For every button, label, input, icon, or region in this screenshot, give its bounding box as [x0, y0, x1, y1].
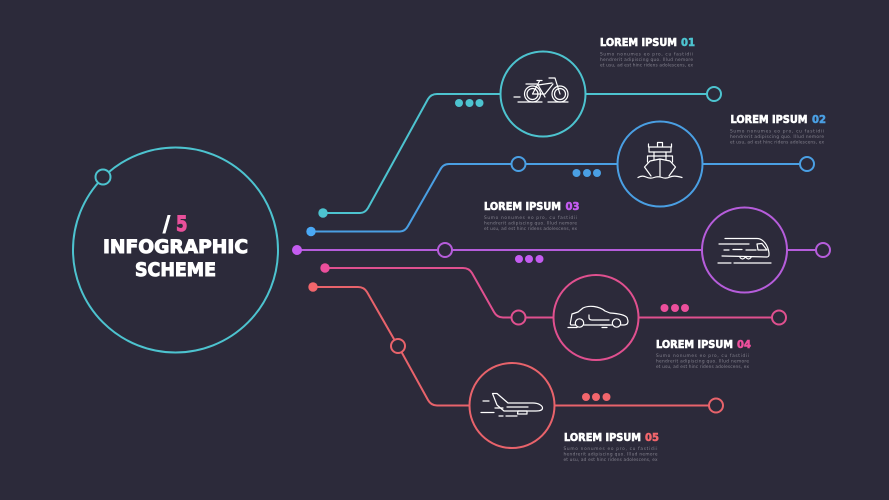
mid node 3 — [438, 243, 452, 257]
dots 2 — [572, 169, 601, 177]
text block 3: 03 — [566, 201, 580, 213]
icon: airplane — [481, 394, 542, 416]
text block 2: 02 — [812, 114, 826, 126]
text block 3 — [484, 201, 580, 232]
start dot 1 — [318, 208, 328, 218]
text block 4: et usu, ad est hinc ridens adolescens, ex — [656, 364, 749, 370]
dots 1 — [455, 99, 484, 107]
text block 3: et usu, ad est hinc ridens adolescens, ex — [484, 226, 577, 232]
text block 1: hendrerit adipiscing quo. Illud nemore — [600, 57, 693, 63]
icon circle 1 — [500, 52, 586, 136]
text block 5: LOREM IPSUM — [564, 432, 641, 444]
text block 2 — [730, 114, 826, 146]
title: number: / — [163, 212, 170, 236]
icon circle 4 — [554, 275, 638, 360]
text block 1 — [600, 37, 695, 68]
end node 3 — [816, 243, 830, 257]
icon: bicycle — [514, 78, 568, 102]
title: number — [163, 212, 188, 236]
icon: train — [718, 238, 771, 263]
end node 5 — [709, 398, 723, 412]
title: infographic scheme: SCHEME — [135, 259, 216, 281]
start dot 5 — [308, 282, 318, 292]
text block 5: 05 — [645, 432, 659, 444]
dots 5 — [582, 393, 610, 401]
text block 3: Sumo nonumes eo pro, cu fastidii — [484, 215, 577, 221]
text block 4: 04 — [737, 339, 751, 351]
icon circle 2 — [618, 122, 702, 206]
icon: car — [568, 306, 628, 328]
branch 2: ship — [306, 114, 826, 236]
end node 1 — [707, 87, 721, 101]
text block 3: hendrerit adipiscing quo. Illud nemore — [484, 220, 577, 226]
title: infographic scheme — [103, 236, 248, 281]
mid node 2 — [512, 157, 526, 171]
connector line 4 — [325, 268, 772, 318]
title: infographic scheme: INFOGRAPHIC — [103, 236, 248, 258]
text block 5: hendrerit adipiscing quo. Illud nemore — [564, 452, 658, 458]
start dot 3 — [292, 245, 302, 255]
text block 1: 01 — [681, 37, 695, 49]
connector line 2 — [311, 164, 800, 232]
title: number: 5 — [176, 212, 188, 236]
text block 1: et usu, ad est hinc ridens adolescens, ex — [600, 62, 693, 68]
text block 2: hendrerit adipiscing quo. Illud nemore — [730, 134, 824, 140]
central circle with title — [73, 148, 278, 352]
branch 3: train — [292, 201, 830, 292]
text block 2: Sumo nonumes eo pro, cu fastidii — [730, 128, 824, 134]
branch 5: airplane — [308, 282, 723, 463]
text block 2: LOREM IPSUM — [730, 114, 808, 126]
end node 2 — [800, 157, 814, 171]
text block 1: Sumo nonumes eo pro, cu fastidii — [600, 52, 693, 58]
text block 4: hendrerit adipiscing quo. Illud nemore — [656, 358, 749, 364]
connector line 5 — [313, 287, 709, 406]
icon circle 3 — [702, 208, 787, 292]
connector line 3 — [297, 249, 816, 251]
start dot 4 — [320, 263, 330, 273]
text block 5 — [564, 432, 659, 463]
text block 5: Sumo nonumes eo pro, cu fastidii — [564, 446, 658, 452]
text block 1: LOREM IPSUM — [600, 37, 677, 49]
end node 4 — [772, 310, 786, 324]
text block 3: LOREM IPSUM — [484, 201, 561, 213]
connector line 1 — [323, 94, 707, 213]
branch 4: car — [320, 263, 786, 370]
text block 4: Sumo nonumes eo pro, cu fastidii — [656, 353, 749, 359]
start dot 2 — [306, 227, 316, 236]
mid node 4 — [512, 310, 526, 324]
mid node 5 — [391, 339, 405, 353]
dots 3 — [515, 255, 544, 263]
icon: ship — [638, 142, 682, 178]
text block 4 — [656, 339, 751, 370]
text block 2: et usu, ad est hinc ridens adolescens, ex — [730, 140, 824, 146]
text block 4: LOREM IPSUM — [656, 339, 733, 351]
icon circle 5 — [470, 363, 554, 448]
dots 4 — [660, 304, 689, 312]
branch 1: bicycle — [318, 37, 721, 218]
text block 5: et usu, ad est hinc ridens adolescens, ex — [564, 457, 658, 463]
